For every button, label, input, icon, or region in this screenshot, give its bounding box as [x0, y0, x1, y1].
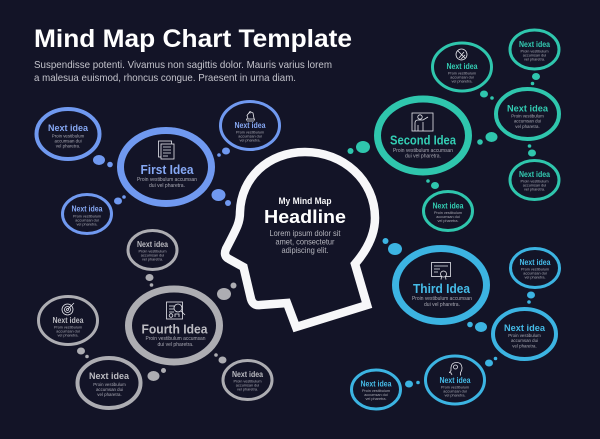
node: next idea top right: accumsan dui [523, 272, 547, 276]
icon: certificate [432, 262, 450, 280]
node: next idea top: accumsan dui [141, 254, 164, 258]
connector bubbles cyan [382, 238, 535, 388]
node: next idea middle right: vel pharetra. [515, 124, 540, 129]
node: next idea top right [510, 248, 560, 288]
node: fourth idea [128, 289, 220, 362]
node: next idea with crossed icon: vel pharetra. [451, 80, 473, 84]
node: next idea top right: vel pharetra. [524, 58, 545, 62]
head text: My Mind Map [278, 196, 332, 206]
node: next idea bottom: Proin vestibulum [434, 211, 462, 215]
title: Mind Map Chart Template [34, 25, 352, 53]
head text: amet, consectetur [276, 236, 335, 246]
node: next idea with crossed icon: Next idea [446, 62, 478, 71]
connector bubbles grey [77, 274, 236, 381]
branch: first idea (blue) [36, 102, 280, 234]
node: next idea middle right: accumsan dui [511, 338, 538, 343]
node: next idea top left: vel pharetra. [56, 144, 80, 148]
node: second idea: dui vel pharetra. [405, 154, 441, 160]
node: next idea lower: Next idea [72, 204, 103, 214]
icon: chess piece [246, 112, 254, 121]
node: next idea top left: Proin vestibulum [52, 134, 85, 138]
node: next idea with chess icon [220, 102, 280, 150]
node: next idea lower [62, 194, 112, 234]
node: next idea with target icon: accumsan dui [56, 330, 80, 334]
node: third idea: Proin vestibulum accumsan [412, 296, 472, 302]
branch: fourth idea (grey) [38, 230, 272, 408]
node: next idea lower: accumsan dui [75, 218, 99, 222]
node: third idea: dui vel pharetra. [424, 302, 460, 308]
node: next idea right: Proin vestibulum [233, 380, 262, 384]
node: next idea bottom: accumsan dui [436, 215, 460, 219]
node: next idea with target icon: vel pharetra. [57, 334, 79, 338]
node: next idea middle right: Next idea [504, 323, 546, 334]
node: second idea: Second Idea [390, 132, 457, 148]
node: next idea with crossed icon [432, 43, 492, 91]
node: next idea bottom left: Next idea [360, 380, 392, 388]
node: next idea with crossed icon: accumsan dui [450, 76, 474, 80]
node: second idea: Proin vestibulum accumsan [393, 148, 453, 154]
node: next idea top: vel pharetra. [142, 258, 163, 262]
node: next idea top right: Next idea [519, 40, 550, 49]
node: next idea top left [36, 109, 100, 159]
node: fourth idea: Proin vestibulum accumsan [146, 336, 206, 342]
node: next idea with head icon: vel pharetra. [444, 394, 466, 398]
subtitle text [34, 59, 332, 84]
node: next idea top left: accumsan dui [54, 138, 82, 144]
node: next idea middle right [493, 309, 556, 359]
node: next idea lower right: Next idea [519, 170, 550, 179]
node: next idea bottom left: vel pharetra. [365, 397, 387, 401]
node: next idea top right: accumsan dui [523, 54, 546, 58]
node: next idea bottom: Proin vestibulum [93, 382, 126, 387]
node: fourth idea: Fourth Idea [142, 322, 208, 336]
node: next idea bottom [424, 192, 472, 230]
node: next idea top left: Next idea [48, 123, 89, 134]
node: next idea with head icon [426, 356, 484, 404]
node: second idea [378, 99, 468, 172]
node: next idea middle right: vel pharetra. [512, 344, 537, 348]
node: next idea middle right [496, 89, 559, 139]
head text: adipiscing elit. [282, 245, 328, 255]
node: next idea bottom: vel pharetra. [437, 219, 459, 223]
node: next idea lower: Proin vestibulum [73, 214, 101, 218]
icon: head with target [450, 362, 462, 376]
node: next idea right: accumsan dui [236, 384, 259, 388]
icon: crossed circle [456, 49, 467, 60]
node: first idea: First Idea [140, 162, 194, 177]
node: next idea with chess icon: Next idea [234, 121, 266, 130]
node: next idea lower right [510, 160, 559, 200]
node: next idea with head icon: Next idea [440, 376, 471, 385]
node: first idea: dui vel pharetra. [149, 183, 185, 189]
node: next idea with crossed icon: Proin vestibulum [448, 72, 476, 76]
node: next idea with head icon: accumsan dui [443, 390, 467, 394]
node: next idea right [223, 360, 272, 400]
node: next idea middle right: Proin vestibulum [508, 333, 541, 338]
icon: report with magnifier [166, 302, 185, 319]
node: next idea lower: vel pharetra. [76, 222, 98, 226]
node: next idea lower right: vel pharetra. [524, 188, 545, 192]
node: next idea bottom [78, 358, 140, 408]
node: first idea [120, 130, 212, 204]
head text: Lorem ipsum dolor sit [270, 228, 341, 238]
node: next idea top right: Proin vestibulum [520, 50, 549, 54]
icon: documents [158, 141, 174, 159]
node: next idea bottom left: accumsan dui [364, 393, 388, 397]
node: next idea top right: Next idea [520, 258, 551, 267]
node: next idea right: Next idea [232, 370, 263, 379]
node: next idea lower right: accumsan dui [523, 184, 546, 188]
node: next idea bottom left: Proin vestibulum [362, 389, 390, 393]
connector bubbles blue [93, 148, 231, 206]
node: next idea bottom: Next idea [432, 202, 464, 210]
node: next idea middle right: accumsan dui [514, 118, 541, 124]
node: next idea top right [510, 30, 559, 69]
node: next idea with chess icon: vel pharetra. [239, 138, 261, 142]
node: next idea bottom: accumsan dui [96, 387, 123, 392]
node: next idea with target icon: Proin vestibulum [54, 326, 82, 330]
node: third idea: Third Idea [413, 281, 471, 296]
node: next idea with head icon: Proin vestibulum [441, 386, 469, 390]
branch: third idea (cyan) [352, 238, 560, 409]
node: next idea top right: vel pharetra. [524, 276, 546, 280]
node: next idea lower right: Proin vestibulum [520, 180, 549, 184]
subtitle text: Suspendisse potenti. Vivamus non sagittis dolor. Mauris varius lorem [34, 59, 332, 71]
icon: presenter at board [412, 113, 433, 131]
head text [264, 196, 346, 255]
subtitle text: a malesua euismod, rhoncus congue. Praesent in urna diam. [34, 72, 296, 84]
node: next idea top: Proin vestibulum [138, 250, 167, 254]
branch: second idea (green) [348, 30, 559, 230]
node: next idea bottom left [352, 370, 400, 409]
node: next idea top: Next idea [137, 240, 168, 249]
head outline [225, 152, 375, 327]
node: next idea middle right: Next idea [507, 104, 549, 114]
node: next idea bottom: Next idea [89, 371, 130, 382]
node: third idea [396, 248, 486, 322]
node: fourth idea: dui vel pharetra. [158, 342, 194, 348]
icon: target [62, 303, 74, 315]
node: next idea bottom: vel pharetra. [97, 392, 122, 397]
connector bubbles green [348, 73, 540, 189]
node: next idea middle right: Proin vestibulum [511, 114, 544, 118]
head text: Headline [264, 207, 346, 227]
node: next idea with target icon [38, 296, 98, 344]
node: next idea right: vel pharetra. [237, 388, 258, 392]
node: next idea with chess icon: Proin vestibulum [236, 130, 264, 134]
node: first idea: Proin vestibulum accumsan [137, 177, 197, 183]
central head [225, 152, 375, 327]
node: next idea with chess icon: accumsan dui [238, 134, 262, 138]
node: next idea top right: Proin vestibulum [521, 268, 549, 272]
node: next idea top [128, 230, 177, 270]
node: next idea with target icon: Next idea [52, 316, 84, 325]
